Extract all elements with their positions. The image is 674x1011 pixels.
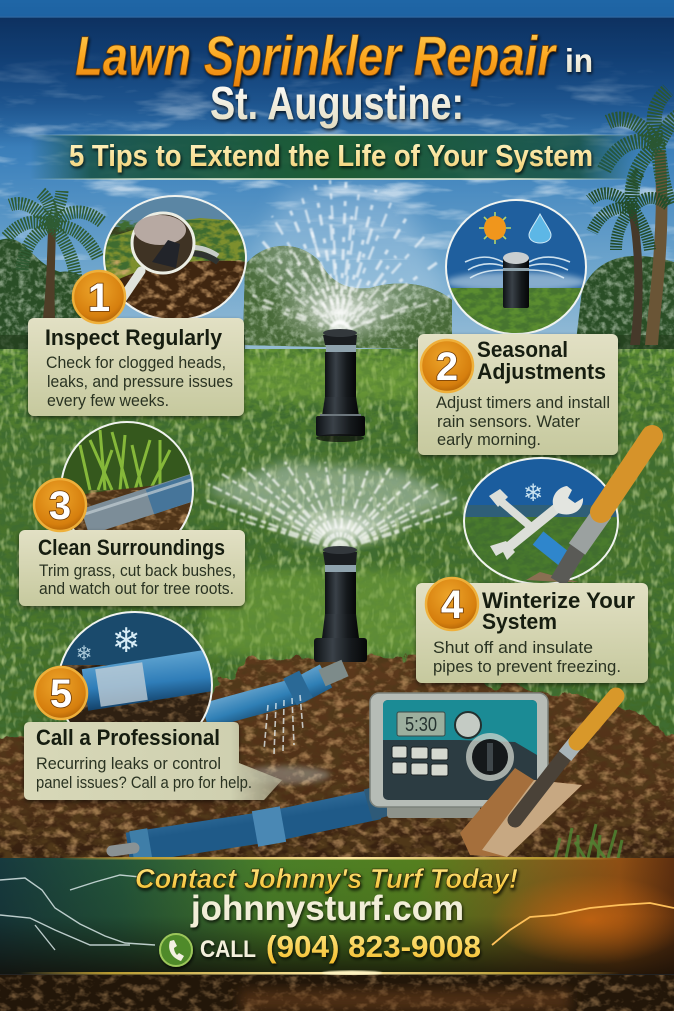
tip 5 panel: panel issues? Call a pro for help. (36, 774, 252, 792)
title line 1: Lawn Sprinkler Repair (75, 24, 558, 87)
tip 4 panel: System (482, 609, 557, 634)
tip 1 panel: every few weeks. (47, 392, 169, 410)
background: sky (0, 0, 674, 360)
tip 1 illustration (103, 195, 247, 318)
badge 2 (421, 340, 473, 392)
upper blue pipe with leak (205, 668, 345, 784)
subtitle ribbon: 5 Tips to Extend the Life of Your System (69, 138, 593, 173)
icon: sun (479, 212, 511, 244)
shovel (460, 696, 616, 857)
tip 2 panel: Adjustments (477, 359, 606, 384)
badge 4: 4 (441, 583, 464, 627)
tip 4 panel: Shut off and insulate (433, 639, 593, 657)
lightning left (0, 875, 155, 950)
badge 3 (34, 479, 86, 531)
palm tree right small (590, 172, 668, 345)
tip 2 panel (418, 334, 618, 455)
tip 3 illustration (61, 421, 194, 530)
tip 3 panel (19, 530, 245, 606)
tip 4 illustration (460, 455, 625, 587)
lightning right (492, 903, 674, 945)
icon: snowflakes: ❄ (112, 621, 140, 661)
soil mound (0, 653, 674, 858)
irrigation controller (370, 693, 548, 818)
icon: snowflakes: ❄ (76, 641, 92, 665)
water spray top (245, 180, 450, 348)
tip 5 panel: Recurring leaks or control (36, 755, 221, 773)
palm tree left (6, 190, 102, 318)
tip 2 panel: early morning. (437, 431, 541, 449)
tip 3 panel: and watch out for tree roots. (39, 580, 234, 598)
footer phone: (904) 823-9008 (266, 929, 481, 964)
water spray bottom (205, 462, 460, 552)
title line 2: St. Augustine: (210, 77, 464, 129)
top banner line (0, 16, 674, 18)
tip 5 panel: Call a Professional (36, 725, 220, 750)
tip 4 panel (416, 583, 648, 683)
controller display: 5:30 (405, 714, 437, 736)
icon: phone (160, 934, 192, 966)
tip 1 panel: leaks, and pressure issues (47, 373, 233, 391)
badge 4 (426, 578, 478, 630)
badge 1 (73, 271, 125, 323)
tip 2 panel: Adjust timers and install (436, 394, 610, 412)
subtitle ribbon (30, 134, 640, 180)
background: tree line (0, 238, 674, 349)
badge 1: 1 (88, 276, 110, 320)
footer bottom glow line (20, 970, 620, 976)
sprinkler head bottom (314, 546, 367, 662)
tip 5 illustration (60, 611, 213, 722)
tip 5 panel (24, 722, 282, 800)
footer heading: Contact Johnny's Turf Today! (135, 863, 518, 894)
footer contact band (0, 857, 674, 974)
tip 4 panel: pipes to prevent freezing. (433, 658, 621, 676)
badge 2: 2 (436, 345, 458, 389)
icon: water drop (529, 214, 551, 243)
badge 3: 3 (49, 484, 71, 528)
large trowel in tip 4 (526, 436, 652, 582)
soil strip below footer (0, 975, 674, 1011)
tip 1 panel (28, 318, 244, 416)
tip 2 illustration (445, 199, 587, 334)
magnifying glass (120, 213, 194, 302)
icon: snowflakes (76, 621, 140, 665)
tip 3 panel: Trim grass, cut back bushes, (39, 562, 236, 580)
icon: snowflake: ❄ (523, 479, 543, 507)
tip 1 panel: Check for clogged heads, (46, 354, 226, 372)
tip 1 panel: Inspect Regularly (45, 325, 223, 350)
sprinkler head top (316, 329, 365, 442)
lower blue pipe (112, 800, 386, 851)
mini sprinkler (465, 252, 570, 308)
badge 5 (35, 667, 87, 719)
lawn (0, 349, 674, 749)
badge 5: 5 (50, 672, 72, 716)
tip 4 panel: Winterize Your (482, 588, 635, 613)
tip 2 panel: rain sensors. Water (437, 413, 581, 431)
footer phone (160, 929, 481, 966)
palm tree right large (604, 90, 674, 345)
title line 1: in (565, 42, 593, 79)
tip 3 panel: Clean Surroundings (38, 535, 225, 560)
footer phone: CALL (200, 936, 256, 963)
grass patch near shovel (555, 824, 622, 858)
icon: wrenches (489, 486, 583, 560)
tip 2 panel: Seasonal (477, 337, 568, 362)
footer website: johnnysturf.com (190, 889, 464, 928)
